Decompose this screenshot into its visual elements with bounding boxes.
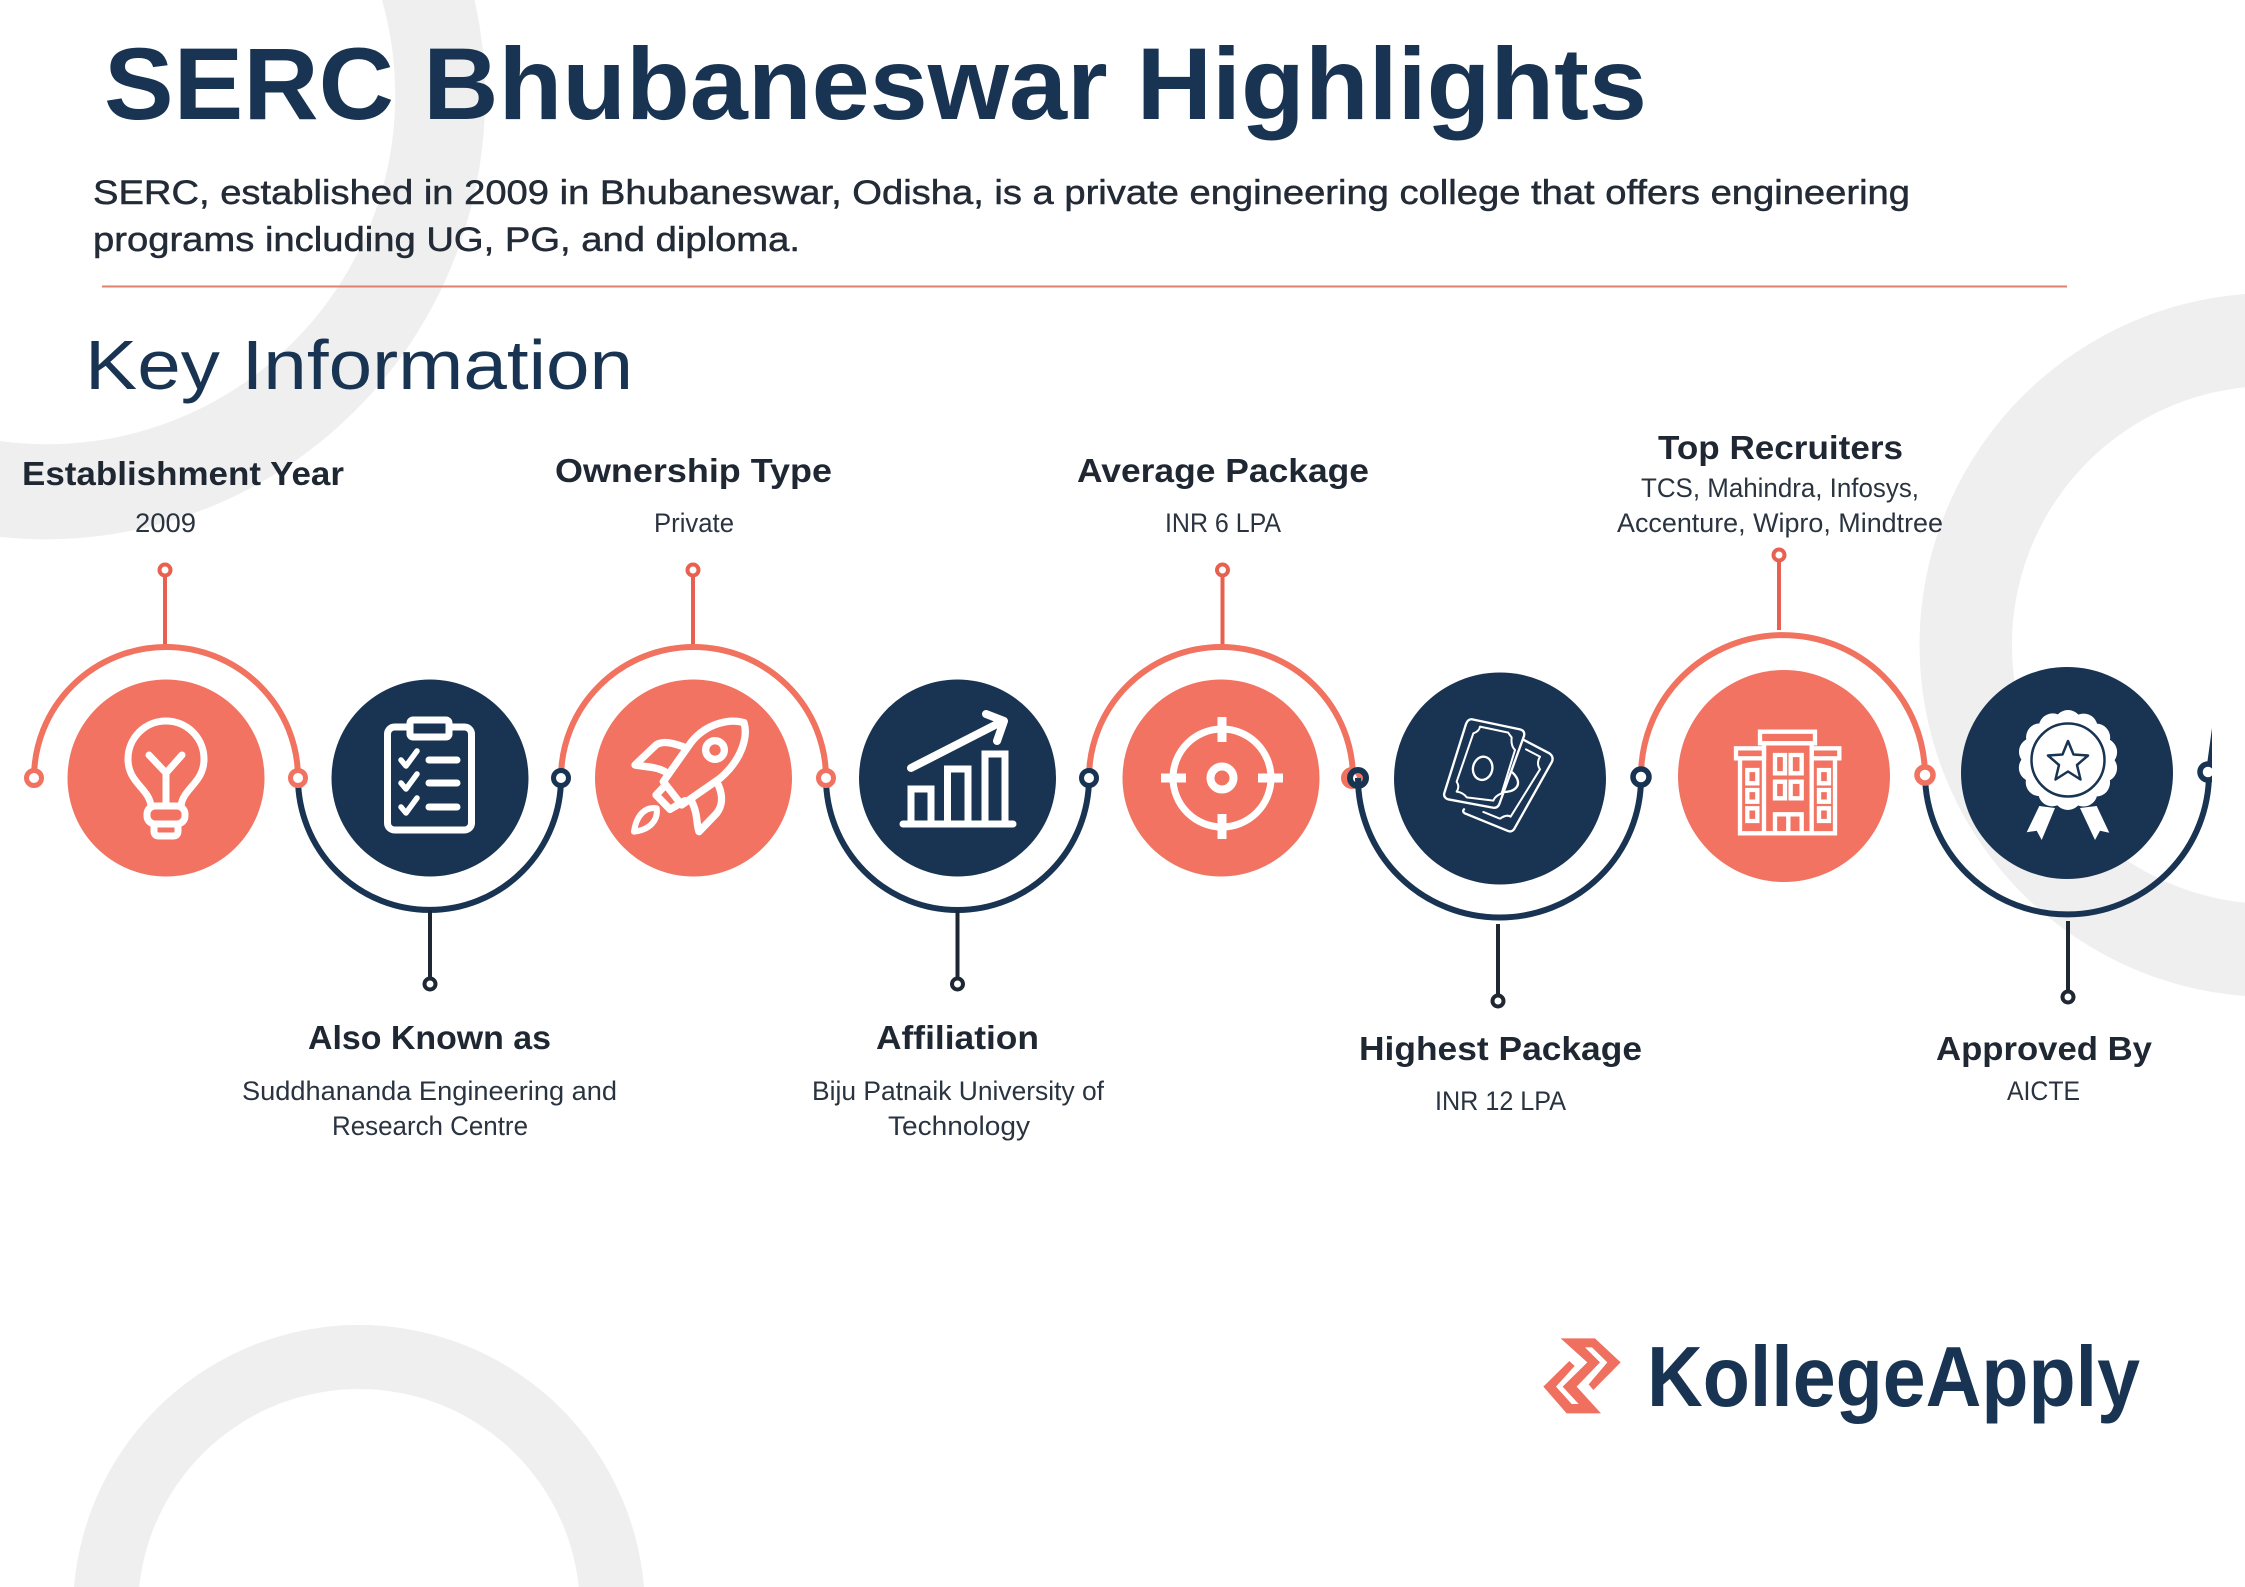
panel: Approved By [1917,667,2216,1106]
label: Average Package [1077,452,1369,538]
icon circle [1961,667,2173,879]
label: Affiliation: Biju Patnaik University of [812,1076,1105,1106]
label: Average Package: Average Package [1077,452,1369,489]
icon: building [1736,732,1839,833]
icon circle [1122,680,1320,876]
connector [1344,770,1641,1006]
label: Ownership Type: Ownership Type [555,452,832,489]
section heading: Key Information: Key Information [85,326,633,404]
panel: Affiliation [812,680,1105,1141]
label: Top Recruiters: Top Recruiters [1658,429,1903,466]
icon circle [859,680,1056,876]
panel: Highest Package [1344,672,1642,1116]
label: Top Recruiters: Accenture, Wipro, Mindtree [1617,508,1943,538]
label: Establishment Year: Establishment Year [22,455,344,492]
connector [1633,550,1925,785]
label: Affiliation [812,1019,1105,1141]
icon: banknotes [1444,719,1553,831]
connector [1925,728,2216,914]
label: Affiliation: Technology [888,1111,1031,1141]
icon: clipboard checklist [388,720,472,830]
panel: Establishment Year [22,455,344,876]
label: Approved By: AICTE [2007,1076,2080,1106]
panel: Average Package [1077,452,1369,876]
logo: KollegeApply [1543,1330,2140,1425]
label: Ownership Type: Private [654,508,734,538]
label: Highest Package: Highest Package [1359,1030,1642,1067]
label: Approved By: Approved By [1936,1030,2153,1067]
icon: rocket [634,721,745,832]
label: Establishment Year [22,455,344,538]
panel: Top Recruiters [1617,429,1943,882]
label: Ownership Type [555,452,832,538]
label: Also Known as: Also Known as [308,1019,551,1056]
icon: light bulb [128,721,204,836]
label: Highest Package: INR 12 LPA [1435,1086,1566,1116]
label: Top Recruiters: TCS, Mahindra, Infosys, [1641,473,1919,503]
icon circle [68,680,264,876]
icon: growth bar chart [903,714,1013,824]
label: Average Package: INR 6 LPA [1165,508,1281,538]
logo mark [1543,1338,1621,1413]
title: SERC Bhubaneswar Highlights [104,27,1647,141]
intro paragraph: SERC, established in 2009 in Bhubaneswar, Odisha, is a private engineering college that offers engineering [93,174,1910,212]
icon circle [1678,670,1890,882]
icon circle [332,680,528,876]
intro paragraph [93,174,1910,259]
background ring: top left [0,0,485,539]
label: Also Known as [242,1019,617,1141]
label: Top Recruiters [1617,429,1943,538]
connector [818,770,1089,990]
icon circle [1394,672,1606,884]
label: Approved By [1936,1030,2153,1106]
icon: target [1161,717,1283,839]
logo wordmark: KollegeApply [1647,1330,2140,1425]
icon circle [595,680,792,876]
label: Also Known as: Research Centre [332,1111,528,1141]
connector [554,564,826,786]
label: Also Known as: Suddhananda Engineering and [242,1076,617,1106]
intro paragraph: programs including UG, PG, and diploma. [93,221,800,259]
background ring: bottom left [74,1325,644,1587]
connector [1082,564,1353,786]
connector [290,770,561,990]
connector [26,564,298,786]
label: Highest Package [1359,1030,1642,1116]
background ring: right [1920,294,2245,996]
label: Affiliation: Affiliation [876,1019,1039,1056]
panel: Ownership Type [554,452,832,876]
label: Establishment Year: 2009 [135,508,196,538]
icon: award badge [2027,720,2109,840]
panel: Also Known as [242,680,617,1141]
